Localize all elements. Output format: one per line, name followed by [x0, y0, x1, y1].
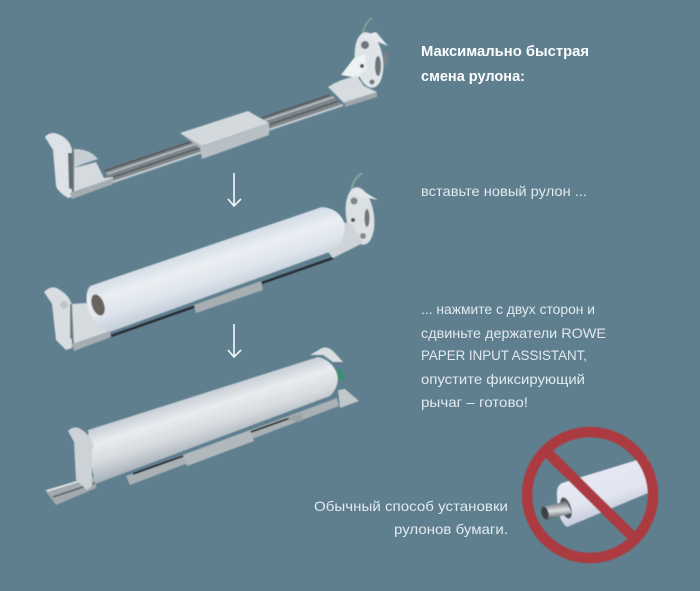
arrow: step one to step two: [228, 173, 241, 206]
metal axle: [540, 501, 572, 520]
text: step two: опустите фиксирующий: [421, 371, 585, 387]
roll core hole: [89, 293, 107, 317]
heading: [421, 43, 589, 85]
text: step two: рычаг – готово!: [421, 394, 528, 410]
text: step two: [421, 301, 606, 410]
text: step two: ... нажмите с двух сторон и: [421, 301, 595, 317]
device: empty holder with rails: [45, 18, 388, 199]
text: step two: сдвиньте держатели ROWE: [421, 325, 606, 341]
arrow: step two to step three: [228, 324, 241, 357]
device: holder with new roll: [44, 173, 378, 351]
roll: [540, 458, 648, 527]
green mechanism: [334, 368, 345, 382]
prohibited standard roll icon: [527, 432, 653, 558]
right end cap: [310, 348, 343, 362]
lower rail: [108, 258, 333, 337]
left bracket: [45, 133, 113, 199]
red prohibition sign: [527, 432, 653, 558]
heading: Максимально быстрая: [421, 43, 589, 60]
left bracket: [44, 287, 111, 351]
rails: [103, 94, 343, 183]
center slider: [180, 111, 269, 159]
paper roll: [86, 207, 345, 332]
left end cap: [68, 427, 94, 490]
paper roll: [88, 357, 338, 484]
text: standard method caption: рулонов бумаги.: [394, 521, 508, 537]
right disc bracket: [328, 18, 388, 107]
text: standard method caption: Обычный способ установки: [314, 498, 508, 514]
device: locked holder with roll: [45, 348, 359, 505]
heading: смена рулона:: [421, 68, 525, 85]
text: standard method caption: [314, 498, 508, 537]
right disc bracket: [328, 173, 378, 258]
base rails: [45, 389, 359, 505]
text: step one: вставьте новый рулон ...: [421, 183, 587, 199]
text: step two: PAPER INPUT ASSISTANT,: [421, 347, 587, 363]
